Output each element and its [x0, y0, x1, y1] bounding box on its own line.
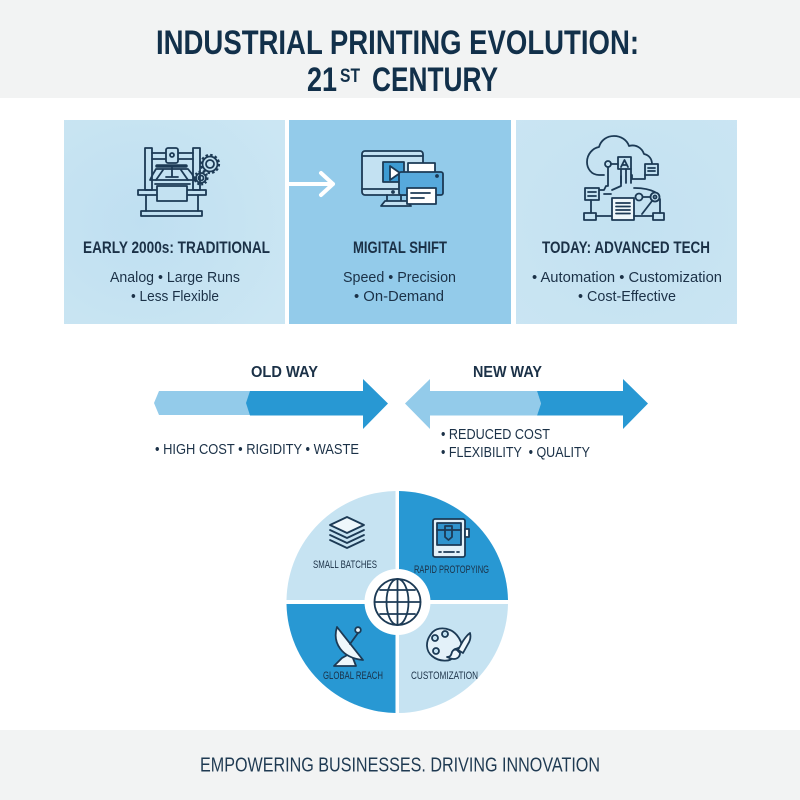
icon: 3d printer: [433, 519, 469, 557]
icon: paint palette: [427, 628, 470, 661]
heading: early 2000s: EARLY 2000s: TRADITIONAL: [83, 239, 270, 257]
text: today bullets: [532, 269, 722, 305]
icon: monitor and printer: [362, 151, 443, 206]
icon: printing press: [138, 148, 219, 216]
title: [156, 24, 639, 99]
heading: new way: NEW WAY: [473, 364, 542, 381]
text: early bullets: Analog • Large Runs: [110, 269, 240, 286]
segment: customization: [399, 604, 508, 713]
text: digital bullets: Speed • Precision: [343, 269, 456, 286]
label: rapid prototyping: RAPID PROTOPYING: [414, 564, 489, 576]
title: CENTURY: [372, 61, 498, 99]
panel: today advanced tech: [516, 120, 737, 324]
icon: stacked layers: [330, 517, 364, 548]
tagline: EMPOWERING BUSINESSES. DRIVING INNOVATION: [200, 754, 600, 776]
heading: today: TODAY: ADVANCED TECH: [542, 239, 710, 257]
text: digital bullets: [343, 269, 456, 305]
text: new way bullets: • FLEXIBILITY • QUALITY: [441, 445, 590, 461]
arrow: old way: [154, 379, 388, 429]
heading: digital shift: MIGITAL SHIFT: [353, 239, 447, 257]
icon: globe hub: [364, 569, 430, 635]
panel: early 2000s traditional: [64, 120, 285, 324]
text: new way bullets: [441, 427, 590, 461]
segment: global reach: [286, 604, 396, 713]
header band: [0, 0, 800, 99]
icon: satellite dish: [334, 627, 363, 666]
text: early bullets: • Less Flexible: [131, 288, 219, 305]
text: early bullets: [110, 269, 240, 305]
label: small batches: SMALL BATCHES: [313, 559, 377, 571]
text: today bullets: • Cost-Effective: [578, 288, 676, 305]
text: digital bullets: • On-Demand: [354, 288, 444, 305]
footer band: [0, 730, 800, 800]
text: old way bullets: • HIGH COST • RIGIDITY • WASTE: [155, 442, 359, 458]
segment: small batches: [286, 491, 396, 600]
text: today bullets: • Automation • Customization: [532, 269, 722, 286]
chart: benefits wheel: [286, 491, 508, 713]
label: customization: CUSTOMIZATION: [411, 670, 478, 682]
label: global reach: GLOBAL REACH: [323, 670, 383, 682]
arrow: new way: [405, 379, 648, 429]
title: INDUSTRIAL PRINTING EVOLUTION:: [156, 24, 639, 62]
icon: cloud network: [584, 136, 664, 220]
panel: digital shift: [289, 120, 511, 324]
arrow: connector: [289, 173, 333, 195]
segment: rapid prototyping: [399, 491, 508, 600]
title: ST: [340, 66, 360, 87]
text: new way bullets: • REDUCED COST: [441, 427, 550, 443]
title: 21: [307, 61, 337, 99]
heading: old way: OLD WAY: [251, 364, 318, 381]
